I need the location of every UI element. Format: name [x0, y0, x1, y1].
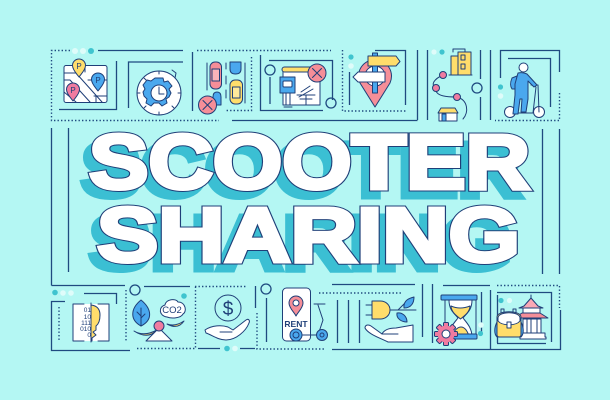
title: SCOOTER: [89, 120, 530, 206]
title: SHARING: [97, 192, 520, 278]
icon: parking map: P: [70, 86, 76, 95]
icon: backpack and pagoda: [495, 295, 548, 339]
icon: plug and hand: [365, 297, 416, 342]
title: SCOOTER: [81, 128, 522, 214]
icon: signpost pin: [353, 53, 400, 107]
icon: bus stop: [280, 64, 326, 107]
icon: binary key: 01: [84, 307, 91, 314]
title: [81, 120, 530, 286]
icon: binary key: 010: [80, 326, 91, 333]
icon: parking map: P: [95, 76, 101, 85]
icon: person on scooter: [504, 63, 544, 118]
icon: parked cars: [198, 62, 245, 114]
icon: binary key: [73, 303, 109, 342]
decorative frame: top strip: [52, 48, 560, 120]
icon: parking map: [64, 59, 107, 102]
icon: rent phone and scooter: RENT: [284, 319, 308, 329]
icon: dollar in hand: [205, 295, 249, 340]
icon: binary key: 10: [84, 314, 91, 321]
title: SCOOTER: [89, 120, 530, 206]
decorative frame: middle verticals: [52, 128, 560, 286]
icon: rent phone and scooter: [282, 288, 328, 341]
icon: balance with leaf and CO2: [133, 300, 185, 341]
icon: gear clock: [137, 70, 181, 115]
icon: hourglass with gear: [434, 295, 477, 346]
icon: binary key: 0: [87, 332, 91, 339]
icon: binary key: 111: [81, 320, 91, 327]
decorative frame: bottom strip: [52, 284, 560, 351]
title: SHARING: [89, 200, 512, 286]
icon: parking map: P: [76, 62, 82, 71]
icon: balance with leaf and CO2: CO2: [162, 305, 182, 316]
icon: route from house to building: [432, 49, 472, 121]
icon: dollar in hand: $: [223, 299, 234, 320]
title: SHARING: [97, 192, 520, 278]
